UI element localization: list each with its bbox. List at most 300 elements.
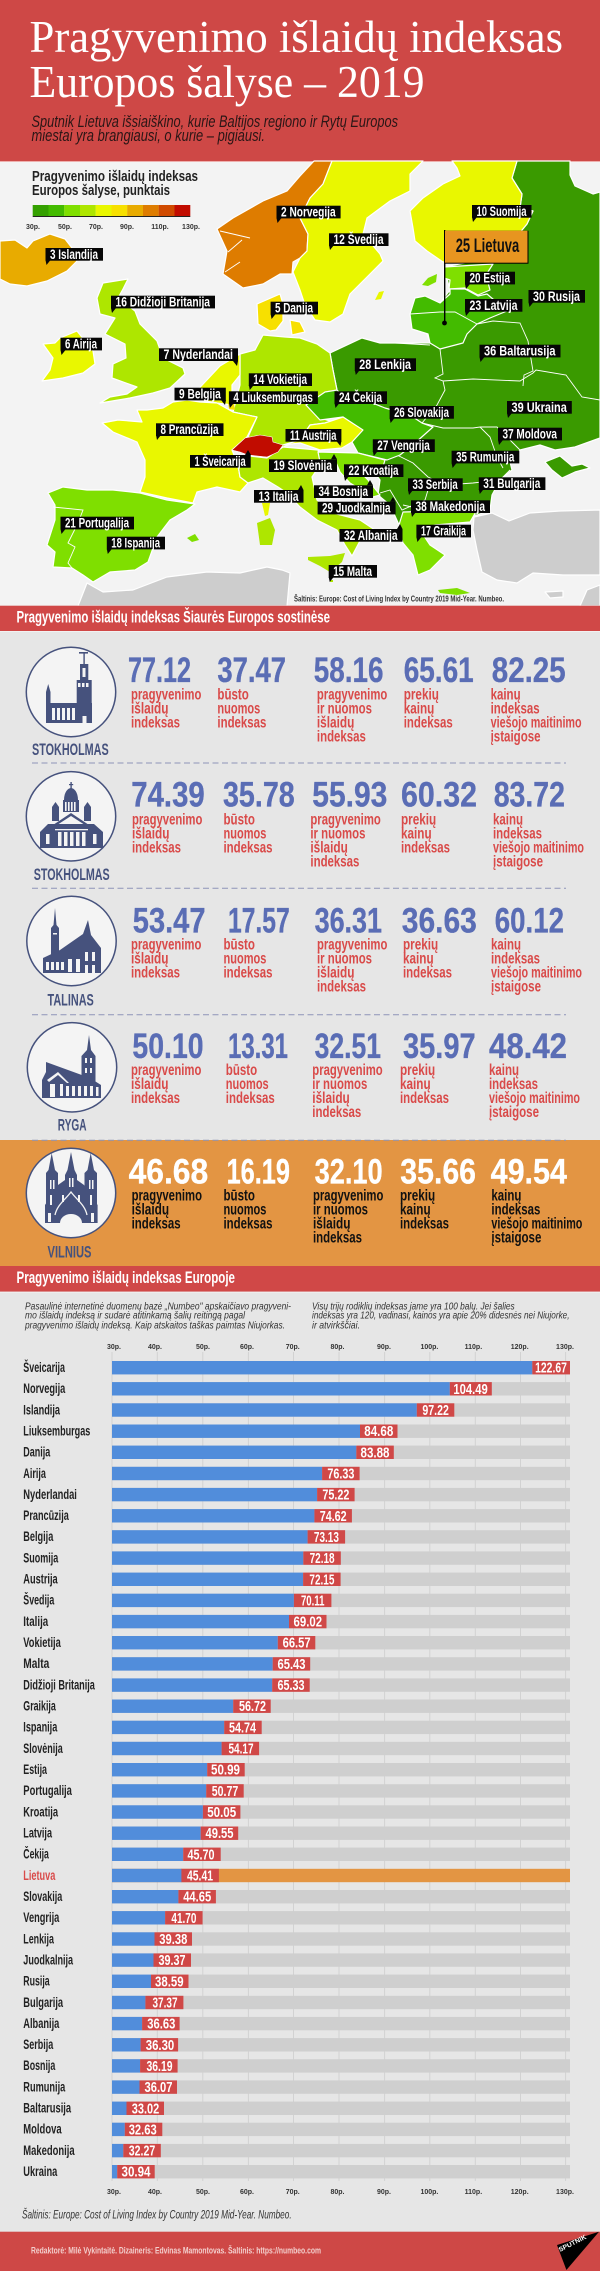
map land: Norway — [217, 161, 332, 288]
intro text right: Visų trijų rodiklių indeksas jame yra 100 balų. Jei šalies — [312, 1301, 515, 1312]
map label: Kroatija — [344, 463, 403, 481]
map land: Czechia Slovakia Hungary — [306, 390, 433, 460]
bar row: Portugalija: Portugalija — [23, 1783, 72, 1798]
map label: Serbija — [408, 477, 463, 495]
map legend: Europos šalyse, punktais — [32, 182, 170, 199]
bar row: Vengrija: Vengrija — [23, 1910, 60, 1925]
metric: living cost — [128, 651, 201, 731]
metric: rent: 16.19 — [227, 1152, 290, 1191]
source note: Šaltinis: Europe: Cost of Living Index by Country 2019 Mid-Year. Numbeo. — [22, 2207, 292, 2222]
metric: rent: nuomos — [217, 700, 260, 717]
bar row: Liuksemburgas: Liuksemburgas — [23, 1423, 90, 1438]
bar row: Prancūzija — [23, 1508, 570, 1525]
bar row: Bulgarija — [23, 1994, 570, 2012]
bar chart — [23, 1344, 574, 2196]
metric: living cost: 50.10 — [132, 1027, 204, 1066]
bottom axis labels: 120p. — [511, 2189, 529, 2196]
city name: VILNIUS — [48, 1243, 92, 1261]
bar row: Airija: Airija — [23, 1466, 46, 1481]
bar row: Nyderlandai — [23, 1487, 570, 1504]
metric: living cost: 74.39 — [131, 776, 205, 815]
map label: Rusija — [528, 289, 585, 307]
map land: Crimea — [545, 456, 590, 478]
bottom axis labels: 110p. — [465, 2189, 482, 2196]
map legend: 50p. — [58, 224, 72, 231]
bar row: Serbija: 36.30 — [146, 2037, 174, 2054]
metric: living and rent: ir nuomos — [310, 825, 365, 842]
map land: Iceland — [0, 234, 77, 286]
bottom axis labels: 30p. — [107, 2189, 121, 2196]
bar row: Liuksemburgas — [23, 1423, 570, 1440]
footer — [0, 2232, 600, 2271]
section heading: capitals — [0, 606, 600, 632]
metric: living cost: indeksas — [131, 964, 180, 981]
metric: goods: 35.97 — [403, 1027, 476, 1066]
metric: goods: indeksas — [401, 839, 450, 856]
map label: Ispanija: 18 Ispanija — [111, 536, 160, 551]
metric: living and rent: 32.51 — [315, 1027, 381, 1066]
section heading: capitals: Pragyvenimo išlaidų indeksas Šiaurės Europos sostinėse — [16, 608, 330, 627]
bar row: Moldova: 32.63 — [129, 2121, 157, 2138]
metric: restaurants: indeksas — [489, 1076, 538, 1093]
metric: goods: 60.32 — [401, 776, 477, 815]
map label: Nyderlandai — [159, 347, 238, 366]
metric: living cost: 53.47 — [133, 901, 206, 940]
map land: Sardinia — [257, 518, 275, 545]
bar row: Didžioji Britanija: Didžioji Britanija — [23, 1677, 95, 1692]
bar row: Vengrija: 41.70 — [171, 1910, 196, 1927]
map label: Portugalija — [60, 516, 134, 534]
map land: eastern Europe dark green — [330, 161, 600, 527]
bottom axis labels: 60p. — [240, 2189, 254, 2196]
bar row: Didžioji Britanija: 65.33 — [278, 1677, 304, 1694]
bottom axis labels: 90p. — [377, 2189, 391, 2196]
map label: Vengrija — [373, 438, 435, 456]
metric: restaurants: kainų — [491, 686, 521, 703]
bar row: Norvegija — [23, 1381, 570, 1398]
map land: Balearic islands — [187, 534, 199, 542]
map label: Liuksemburgas — [229, 390, 318, 408]
bar row: Islandija — [23, 1402, 570, 1419]
map label: Lenkija: 28 Lenkija — [359, 357, 411, 372]
bar row: Rumunija: Rumunija — [23, 2079, 66, 2094]
bar row: Ukraina: Ukraina — [23, 2164, 58, 2179]
map label: Malta: 15 Malta — [333, 564, 372, 579]
city name: STOKHOLMAS — [32, 741, 109, 759]
bar row: Slovėnija: 54.17 — [228, 1740, 254, 1758]
bar row: Ispanija: Ispanija — [23, 1720, 58, 1735]
intro text left: pragyvenimo išlaidų indeksą. Kaip atskaitos taškas paimtas Niujorkas. — [24, 1320, 285, 1331]
icon: Tallinn town hall — [27, 896, 116, 986]
map label: Prancūzija: 8 Prancūzija — [160, 422, 219, 437]
metric: living and rent: indeksas — [313, 1230, 362, 1247]
title: Pragyvenimo išlaidų indeksas — [30, 12, 563, 62]
metric: rent: 13.31 — [228, 1027, 288, 1066]
map land: Gotland — [375, 291, 384, 300]
bar row: Lenkija: Lenkija — [23, 1931, 54, 1946]
map borders in the east — [380, 321, 600, 510]
metric: restaurants: kainų — [489, 1062, 519, 1079]
metric: living cost: išlaidų — [132, 1202, 169, 1219]
map label: Rumunija: 35 Rumunija — [456, 450, 515, 465]
metric: restaurants: indeksas — [491, 1202, 540, 1219]
metric: rent: indeksas — [224, 1216, 272, 1233]
map label: Bosnija: 34 Bosnija — [318, 484, 368, 499]
bar row: Suomija — [23, 1550, 570, 1567]
top axis labels: 90p. — [377, 1344, 391, 1351]
map label: Austrija: 11 Austrija — [290, 428, 337, 443]
metric: rent — [226, 1027, 288, 1107]
bar row: Ispanija — [23, 1719, 570, 1736]
bar row: Kroatija — [23, 1804, 570, 1821]
bar row: Bulgarija: 37.37 — [152, 1994, 178, 2012]
metric: restaurants — [491, 1152, 582, 1247]
subtitle — [32, 113, 398, 145]
bar row: Islandija: 97.22 — [422, 1402, 449, 1419]
metric: living cost: išlaidų — [131, 700, 168, 717]
metric: rent: nuomos — [224, 950, 266, 967]
map land: Sicily — [308, 553, 345, 572]
map label: Vokietija — [249, 372, 312, 390]
map label: Islandija — [46, 247, 103, 265]
metric: living and rent: indeksas — [317, 978, 366, 995]
metric: living and rent: indeksas — [317, 728, 366, 745]
subtitle: Sputnik Lietuva išsiaiškino, kurie Baltijos regiono ir Rytų Europos — [32, 113, 398, 131]
map land: Luxembourg — [228, 402, 235, 410]
city name: RYGA — [58, 1117, 87, 1135]
metric: restaurants: indeksas — [493, 825, 542, 842]
bar row: Slovėnija: Slovėnija — [23, 1741, 63, 1756]
bar row: Lenkija: 39.38 — [159, 1931, 187, 1948]
metric: rent: būsto — [224, 936, 255, 953]
metric: living and rent: 55.93 — [312, 776, 387, 815]
bar row: Estija: 50.99 — [211, 1762, 240, 1779]
top axis labels: 110p. — [465, 1344, 482, 1351]
bar row: Rusija: Rusija — [23, 1974, 50, 1989]
metric: rent: indeksas — [217, 714, 266, 731]
map label: Kroatija: 22 Kroatija — [348, 463, 399, 478]
bar row: Islandija: Islandija — [23, 1402, 60, 1417]
bar row: Ukraina — [23, 2164, 570, 2181]
map label: Malta — [329, 564, 377, 582]
metric: rent — [224, 1152, 290, 1233]
metric: living cost: indeksas — [132, 1216, 181, 1233]
metric: living and rent — [314, 651, 387, 745]
bar row: Rusija: 38.59 — [155, 1973, 184, 1990]
top axis labels: 80p. — [330, 1344, 345, 1351]
bottom axis labels: 130p. — [556, 2189, 574, 2196]
metric: goods: 65.61 — [404, 651, 474, 690]
bar row: Italija: 69.02 — [294, 1614, 322, 1631]
icon: cathedral — [26, 772, 116, 861]
map label: Didžioji Britanija: 16 Didžioji Britanija — [116, 295, 210, 310]
metric: restaurants: kainų — [493, 811, 523, 828]
map label: Italija: 13 Italija — [258, 489, 299, 504]
metric: living cost: 46.68 — [129, 1152, 208, 1191]
metric: living and rent: ir nuomos — [317, 950, 372, 967]
bar row: Moldova — [23, 2121, 570, 2138]
bar row: Latvija: Latvija — [23, 1825, 52, 1840]
map label: Slovėnija — [269, 454, 337, 473]
map land: Great Britain — [97, 279, 185, 403]
logo: Sputnik — [557, 2232, 599, 2270]
bar row: Bosnija: 36.19 — [146, 2058, 172, 2075]
metric: goods: indeksas — [400, 1090, 449, 1107]
map label: Juodkalnija: 29 Juodkalnija — [322, 501, 391, 516]
map label: Čekija — [334, 390, 387, 408]
map label: Juodkalnija — [318, 497, 396, 516]
map label: Moldova: 37 Moldova — [502, 427, 557, 442]
title — [30, 12, 563, 107]
bar row: Italija — [23, 1614, 570, 1631]
map label: Vokietija: 14 Vokietija — [253, 372, 307, 387]
map land: Estonian islands — [422, 274, 437, 286]
bar row: Baltarusija: 33.02 — [132, 2100, 159, 2117]
bar row: Ispanija: 54.74 — [229, 1719, 256, 1736]
intro text left — [24, 1301, 292, 1331]
metric: goods: kainų — [404, 700, 434, 717]
metric: living and rent: 58.16 — [314, 651, 384, 690]
map label: Albanija: 32 Albanija — [344, 528, 398, 543]
map legend: 110p. — [151, 224, 169, 231]
bar row: Albanija: Albanija — [23, 2016, 60, 2031]
metric: restaurants: 82.25 — [492, 651, 566, 690]
bar row: Danija: Danija — [23, 1445, 51, 1460]
bar row: Vengrija — [23, 1910, 570, 1927]
metric: goods: kainų — [400, 1202, 431, 1219]
bar row: Estija — [23, 1762, 570, 1779]
map label: Slovakija: 26 Slovakija — [394, 405, 449, 420]
bar row: Juodkalnija: 39.37 — [158, 1952, 186, 1969]
metric: restaurants: indeksas — [491, 950, 540, 967]
metric: living and rent — [310, 776, 387, 870]
metric: goods: indeksas — [403, 964, 452, 981]
map legend — [26, 168, 200, 231]
map label: Estija: 20 Estija — [470, 271, 510, 286]
metric: living and rent: indeksas — [312, 1104, 361, 1121]
metric: rent: 37.47 — [217, 651, 286, 690]
logo: Sputnik: SPUTNIK — [558, 2234, 588, 2254]
metric: rent: būsto — [224, 811, 255, 828]
top axis labels: 130p. — [556, 1344, 574, 1351]
bar row: Slovakija: Slovakija — [23, 1889, 63, 1904]
map source note: Šaltinis: Europe: Cost of Living Index by Country 2019 Mid-Year. Numbeo. — [294, 593, 504, 604]
metric: living cost — [131, 1027, 204, 1107]
map label: Rumunija — [452, 450, 519, 468]
bar row: Suomija: 72.18 — [310, 1550, 335, 1567]
icon: Riga cathedral — [27, 1023, 117, 1112]
panel: Stockholm row 1 — [26, 647, 582, 759]
metric: living cost: išlaidų — [131, 950, 168, 967]
bar row: Baltarusija — [23, 2100, 570, 2117]
bar row: Lietuva highlighted — [23, 1868, 570, 1884]
metric: goods: 36.63 — [402, 901, 477, 940]
map label: Slovakija — [390, 405, 454, 423]
map land: Finland — [410, 161, 533, 262]
metric: goods: kainų — [400, 1076, 431, 1093]
bar row: Liuksemburgas: 84.68 — [364, 1423, 393, 1440]
bar row: Makedonija: 32.27 — [129, 2143, 155, 2160]
map label: Ukraina: 39 Ukraina — [512, 400, 567, 415]
bar row: Estija: Estija — [23, 1762, 47, 1777]
map land: Malta — [330, 580, 333, 582]
map land: Greece — [398, 510, 477, 575]
map label: Moldova — [498, 427, 562, 445]
bar row: Čekija: 45.70 — [188, 1846, 214, 1863]
metric: restaurants: 49.54 — [491, 1152, 567, 1191]
map Norway fjords — [220, 231, 250, 272]
bar row: Prancūzija: 74.62 — [320, 1508, 347, 1525]
map label: Suomija — [472, 204, 532, 222]
bar row: Latvija: 49.55 — [206, 1825, 234, 1842]
map label: Makedonija — [411, 499, 490, 517]
metric: rent — [224, 901, 290, 981]
metric: living and rent — [312, 1027, 383, 1121]
map label: Graikija: 17 Graikija — [421, 524, 466, 539]
bar row: Albanija — [23, 2016, 570, 2033]
bar row: Albanija: 36.63 — [147, 2016, 175, 2033]
metric: living cost: pragyvenimo — [131, 686, 201, 703]
metric: restaurants: įstaigose — [489, 1104, 539, 1121]
bar row: Graikija — [23, 1698, 570, 1715]
map label: Estija — [465, 271, 515, 289]
map land: North Africa and Turkey — [78, 510, 600, 606]
bar row: Nyderlandai: 75.22 — [322, 1487, 349, 1504]
map land: France — [102, 400, 257, 503]
metric: rent: indeksas — [224, 839, 272, 856]
top axis labels: 60p. — [240, 1344, 254, 1351]
map label: Liuksemburgas: 4 Liuksemburgas — [233, 390, 313, 405]
metric: living cost — [131, 776, 205, 856]
map label: Čekija: 24 Čekija — [339, 390, 382, 405]
map label: Bulgarija: 31 Bulgarija — [483, 476, 541, 491]
bar row: Baltarusija: Baltarusija — [23, 2101, 71, 2116]
metric: living and rent: ir nuomos — [313, 1202, 368, 1219]
bar row: Portugalija — [23, 1783, 570, 1800]
metric: living cost — [131, 901, 206, 981]
metric: living and rent: išlaidų — [310, 839, 348, 856]
city name: TALINAS — [48, 992, 94, 1010]
map label: Latvija: 23 Latvija — [470, 298, 518, 313]
metric: goods: kainų — [401, 825, 432, 842]
metric: restaurants: indeksas — [491, 700, 540, 717]
bar row: Ukraina: 30.94 — [122, 2164, 151, 2181]
bar row: Austrija: 72.15 — [309, 1571, 334, 1588]
metric: goods: prekių — [403, 936, 438, 953]
bar row: Makedonija — [23, 2143, 570, 2160]
bar row: Lietuva highlighted: 45.41 — [187, 1868, 213, 1884]
subtitle: miestai yra brangiausi, o kurie – pigiausi. — [32, 127, 265, 145]
bar row: Lenkija — [23, 1931, 570, 1948]
bar row: Vokietija: 66.57 — [283, 1635, 311, 1652]
metric: living cost: išlaidų — [132, 825, 170, 842]
map label: Italija — [254, 485, 304, 504]
map label: Latvija — [465, 298, 522, 316]
map label: Švedija — [329, 232, 388, 250]
bar row: Danija: 83.88 — [360, 1444, 390, 1461]
metric: living and rent: ir nuomos — [312, 1076, 367, 1093]
map label: Šveicarija: 1 Šveicarija — [194, 454, 246, 469]
metric: restaurants: kainų — [491, 1188, 521, 1205]
map land: Austria — [283, 417, 363, 450]
metric: restaurants: 83.72 — [494, 776, 565, 815]
metric: living and rent: išlaidų — [317, 964, 354, 981]
top axis labels: 50p. — [196, 1344, 210, 1351]
map label: Baltarusija — [480, 344, 560, 362]
bar row: Nyderlandai: Nyderlandai — [23, 1487, 77, 1502]
map label: Ukraina — [507, 400, 572, 418]
metric: rent: nuomos — [224, 825, 266, 842]
metric: living and rent: indeksas — [310, 853, 359, 870]
bar row: Slovakija: 44.65 — [183, 1889, 211, 1906]
bar row: Slovakija — [23, 1889, 570, 1906]
bar row: Serbija: Serbija — [23, 2037, 54, 2052]
bar row: Rumunija — [23, 2079, 570, 2096]
top axis labels: 120p. — [511, 1344, 529, 1351]
map land: Sweden — [293, 161, 423, 322]
metric: rent: 35.78 — [223, 776, 295, 815]
metric: living and rent: pragyvenimo — [317, 686, 387, 703]
metric: living and rent: pragyvenimo — [310, 811, 381, 828]
icon: Stockholm city hall — [26, 647, 116, 737]
title: Europos šalyse – 2019 — [30, 57, 424, 107]
bar row: Malta — [23, 1656, 570, 1673]
map legend: 30p. — [26, 224, 40, 231]
bar row: Vokietija: Vokietija — [23, 1635, 61, 1650]
bar row: Bosnija — [23, 2058, 570, 2075]
bar row: Prancūzija: Prancūzija — [23, 1508, 69, 1523]
bottom axis labels — [107, 2189, 574, 2196]
map label: Danija — [271, 301, 318, 319]
map label: Lenkija — [355, 357, 416, 375]
bar row: Lietuva highlighted: Lietuva — [23, 1868, 56, 1883]
map label: Albanija — [340, 524, 402, 543]
bar row: Malta: Malta — [23, 1656, 50, 1671]
panel: Vilnius highlighted — [0, 1140, 600, 1266]
metric: rent: būsto — [224, 1188, 255, 1205]
bar row: Graikija: Graikija — [23, 1698, 56, 1713]
metric: living cost: indeksas — [131, 1090, 180, 1107]
map label: Airija: 6 Airija — [65, 337, 97, 352]
bar row: Rumunija: 36.07 — [144, 2079, 172, 2096]
metric: living and rent: 32.10 — [315, 1152, 383, 1191]
map label: Serbija: 33 Serbija — [412, 477, 458, 492]
metric: living cost: 77.12 — [128, 651, 191, 690]
map legend: 70p. — [89, 224, 103, 231]
metric: goods: prekių — [404, 686, 439, 703]
metric: rent — [223, 776, 295, 856]
bar row: Danija — [23, 1444, 570, 1461]
intro text right: ir atvirkščiai. — [312, 1320, 360, 1331]
bar row: Graikija: 56.72 — [239, 1698, 266, 1715]
bar row: Juodkalnija: Juodkalnija — [23, 1952, 73, 1967]
metric: restaurants — [493, 776, 584, 870]
metric: restaurants — [491, 651, 582, 745]
map label: Makedonija: 38 Makedonija — [416, 499, 485, 514]
top axis labels: 70p. — [286, 1344, 300, 1351]
metric: living cost: išlaidų — [131, 1076, 168, 1093]
flag callout: Lietuva — [442, 230, 528, 325]
map label: Didžioji Britanija — [111, 295, 215, 313]
metric: rent — [217, 651, 286, 731]
metric: living cost — [129, 1152, 208, 1233]
metric: goods: indeksas — [400, 1216, 449, 1233]
city name: STOKHOLMAS — [34, 866, 110, 884]
metric: restaurants: 48.42 — [489, 1027, 567, 1066]
panel: Tallinn — [27, 896, 582, 1010]
metric: restaurants: 60.12 — [495, 901, 564, 940]
map label: Danija: 5 Danija — [275, 301, 313, 316]
